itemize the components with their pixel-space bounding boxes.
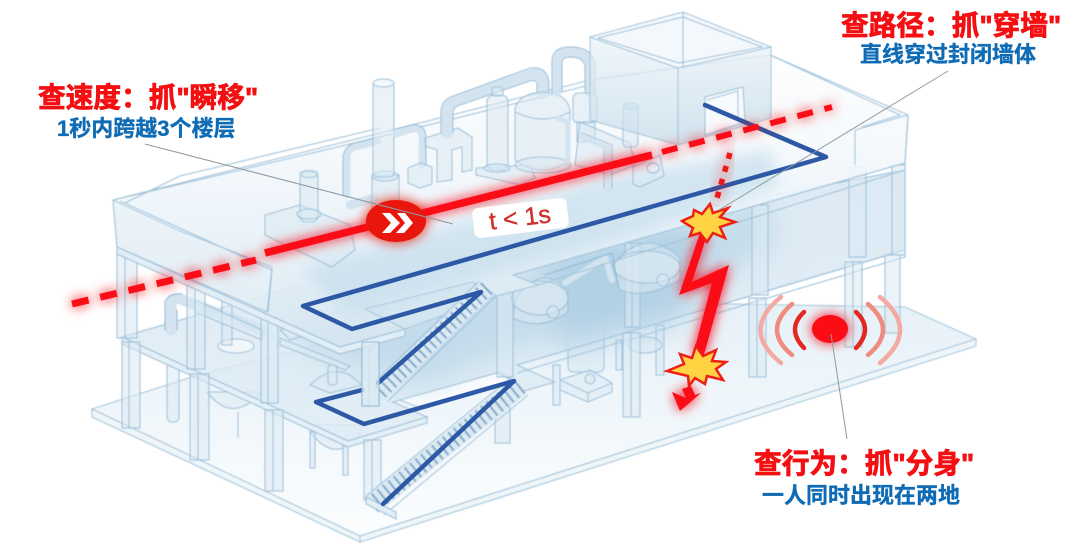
callout: speed: 查速度：抓"瞬移" [38,82,258,113]
leader line: speed [145,144,453,224]
process equipment [265,47,664,267]
icon: speed badge [366,200,426,242]
icon: lower impact burst [667,346,726,386]
under-floor haze [290,200,780,390]
pillar over lower route [362,342,379,406]
icon: down arrow [672,386,701,411]
callout: speed [38,82,258,141]
wall-crossing dotted track [715,153,730,205]
base plate [92,300,976,542]
lightning path [679,233,729,358]
leader line: path [719,71,948,210]
upper floor haze [300,150,780,315]
callout: path: 查路径：抓"穿墙" [841,10,1061,41]
callout: speed: 1秒内跨越3个楼层 [57,116,235,141]
lower floor slab [122,170,905,447]
blue inspection route [303,105,826,504]
stairs upper [375,281,495,401]
callout: path [841,10,1061,67]
icon: upper impact burst [682,204,735,242]
callout: behaviour [754,448,974,508]
leader line: behaviour [831,334,847,439]
icon: duplicate signal [760,297,900,363]
callout: behaviour: 查行为：抓"分身" [754,448,974,479]
callout: behaviour: 一人同时出现在两地 [762,483,960,508]
building illustration [92,12,976,542]
upper floor slab and roof [113,55,908,354]
label: t < 1s: t < 1s [488,200,552,236]
columns [117,165,905,500]
stairs lower [366,377,528,519]
label: t < 1s [472,197,569,239]
ground floor equipment [167,297,664,475]
lower-left machinery [165,294,362,393]
callout: path: 直线穿过封闭墙体 [860,42,1036,67]
tower room [590,12,771,145]
mid floor vessels [512,243,680,324]
red speed trajectory [72,107,832,304]
